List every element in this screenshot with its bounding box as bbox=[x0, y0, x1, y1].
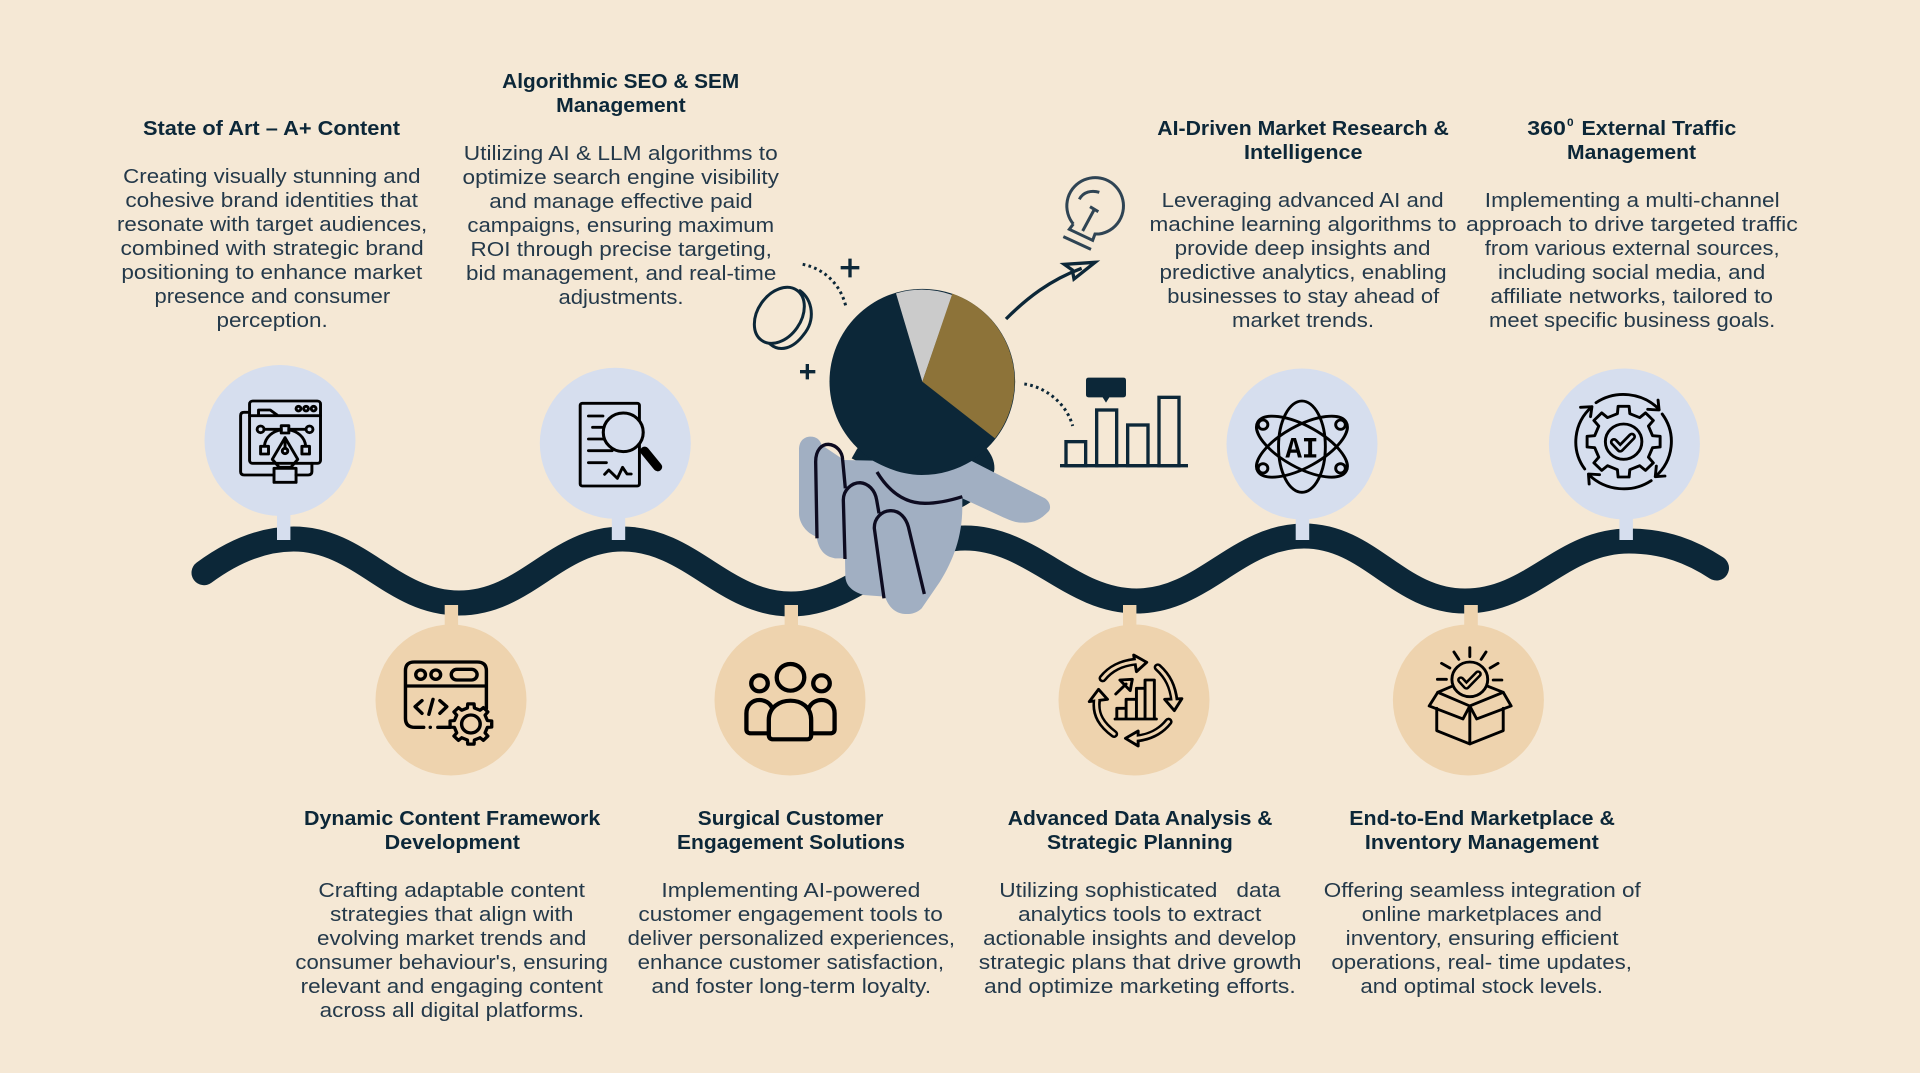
bar chart icon bbox=[1060, 378, 1188, 466]
heading: Advanced Data Analysis: Strategic Planning bbox=[1047, 832, 1233, 854]
panel: Surgical Customer Engagement bbox=[628, 808, 955, 998]
heading: Dynamic Content Framework: Dynamic Content Framework bbox=[304, 808, 601, 830]
description: Dynamic Content Framework bbox=[295, 880, 608, 1022]
heading: Surgical Customer Engagement: Surgical Customer bbox=[698, 808, 884, 830]
description: Advanced Data Analysis: and optimize marketing efforts. bbox=[984, 976, 1296, 998]
description: AI-Driven Market Research: businesses to stay ahead of bbox=[1167, 286, 1440, 308]
heading: AI-Driven Market Research: AI-Driven Market Research & bbox=[1157, 118, 1449, 140]
description: Advanced Data Analysis: actionable insights and develop bbox=[983, 928, 1296, 950]
heading: Algorithmic SEO bbox=[502, 71, 739, 117]
description: End-to-End Marketplace: and optimal stock levels. bbox=[1360, 976, 1603, 998]
description: 360 External Traffic: approach to drive targeted traffic bbox=[1466, 214, 1798, 236]
heading: 360 External Traffic: 0 bbox=[1567, 117, 1574, 129]
description: State of Art: cohesive brand identities that bbox=[125, 190, 418, 212]
description: 360 External Traffic: Implementing a multi-channel bbox=[1485, 190, 1780, 212]
description: AI-Driven Market Research: machine learning algorithms to bbox=[1150, 214, 1457, 236]
description: Advanced Data Analysis: strategic plans that drive growth bbox=[979, 952, 1302, 974]
description: State of Art bbox=[117, 166, 427, 332]
icon: AI atom bbox=[1247, 401, 1357, 492]
heading: Surgical Customer Engagement: Engagement Solutions bbox=[677, 832, 905, 854]
heading: 360 External Traffic: External Traffic bbox=[1582, 118, 1736, 140]
icon: code window and gear bbox=[405, 662, 492, 744]
hand bbox=[799, 437, 1050, 614]
heading: AI-Driven Market Research bbox=[1157, 118, 1449, 164]
node 2: blue circle with search icon bbox=[540, 368, 691, 540]
description: 360 External Traffic: from various external sources, bbox=[1485, 238, 1780, 260]
icon: pen tool in browser window bbox=[241, 401, 321, 482]
icon: AI atom: AI bbox=[1285, 434, 1318, 467]
description: State of Art: combined with strategic brand bbox=[120, 238, 424, 260]
description: AI-Driven Market Research: market trends. bbox=[1232, 310, 1374, 332]
heading: End-to-End Marketplace: Inventory Management bbox=[1365, 832, 1599, 854]
heading: Advanced Data Analysis bbox=[1008, 808, 1272, 854]
description: AI-Driven Market Research: provide deep insights and bbox=[1175, 238, 1430, 260]
icon: large plus bbox=[841, 259, 859, 277]
dotted arc right bbox=[1024, 384, 1073, 426]
description: State of Art: resonate with target audiences, bbox=[117, 214, 427, 236]
description: Algorithmic SEO: ROI through precise targeting, bbox=[470, 239, 772, 261]
description: Surgical Customer Engagement bbox=[628, 880, 955, 998]
node 7: orange circle with analytics icon bbox=[1058, 605, 1210, 776]
description: Advanced Data Analysis: Utilizing sophisticated data bbox=[999, 880, 1281, 902]
arrow to lightbulb bbox=[1006, 262, 1095, 319]
description: End-to-End Marketplace: inventory, ensuring efficient bbox=[1346, 928, 1619, 950]
description: Surgical Customer Engagement: enhance customer satisfaction, bbox=[638, 952, 944, 974]
description: End-to-End Marketplace bbox=[1324, 880, 1641, 998]
description: Algorithmic SEO: adjustments. bbox=[558, 287, 684, 309]
description: 360 External Traffic bbox=[1466, 190, 1798, 332]
panel: End-to-End Marketplace bbox=[1324, 808, 1641, 998]
panel: Dynamic Content Framework bbox=[295, 808, 608, 1022]
description: Dynamic Content Framework: across all digital platforms. bbox=[320, 1000, 584, 1022]
node 3: blue circle with AI icon bbox=[1226, 368, 1378, 540]
description: Algorithmic SEO: and manage effective paid bbox=[489, 191, 753, 213]
description: Dynamic Content Framework: strategies that align with bbox=[330, 904, 573, 926]
timeline wave bbox=[204, 536, 1716, 604]
description: Dynamic Content Framework: consumer behaviour's, ensuring bbox=[295, 952, 608, 974]
heading: End-to-End Marketplace bbox=[1349, 808, 1615, 854]
description: Advanced Data Analysis: analytics tools to extract bbox=[1018, 904, 1262, 926]
panel: 360 External Traffic bbox=[1466, 117, 1798, 332]
node 1: blue circle with design icon bbox=[204, 365, 356, 540]
description: State of Art: positioning to enhance market bbox=[121, 262, 423, 284]
description: AI-Driven Market Research: Leveraging advanced AI and bbox=[1162, 190, 1444, 212]
description: Algorithmic SEO: Utilizing AI & LLM algorithms to bbox=[464, 143, 778, 165]
description: 360 External Traffic: meet specific business goals. bbox=[1489, 310, 1775, 332]
description: Surgical Customer Engagement: deliver personalized experiences, bbox=[628, 928, 955, 950]
heading: Advanced Data Analysis: Advanced Data Analysis & bbox=[1008, 808, 1272, 830]
heading: 360 External Traffic bbox=[1527, 117, 1736, 164]
heading: Dynamic Content Framework bbox=[304, 808, 601, 854]
node 4: blue circle with gear icon bbox=[1549, 368, 1700, 540]
heading: Algorithmic SEO: Management bbox=[556, 95, 686, 117]
heading: AI-Driven Market Research: Intelligence bbox=[1244, 142, 1362, 164]
description: State of Art: presence and consumer bbox=[154, 286, 391, 308]
description: Algorithmic SEO: bid management, and real-time bbox=[466, 263, 776, 285]
description: Surgical Customer Engagement: customer engagement tools to bbox=[638, 904, 943, 926]
panel: Advanced Data Analysis bbox=[979, 808, 1302, 998]
description: End-to-End Marketplace: Offering seamless integration of bbox=[1324, 880, 1641, 902]
panel: State of Art bbox=[117, 118, 427, 332]
description: Algorithmic SEO: campaigns, ensuring maximum bbox=[467, 215, 774, 237]
description: 360 External Traffic: including social media, and bbox=[1498, 262, 1765, 284]
icon: coin bbox=[744, 278, 815, 353]
description: End-to-End Marketplace: online marketplaces and bbox=[1362, 904, 1602, 926]
heading: End-to-End Marketplace: End-to-End Marketplace & bbox=[1349, 808, 1615, 830]
node 5: orange circle with code icon bbox=[376, 605, 526, 776]
icon: lightbulb bbox=[1063, 178, 1123, 249]
description: Algorithmic SEO: optimize search engine visibility bbox=[462, 167, 779, 189]
heading: Dynamic Content Framework: Development bbox=[385, 832, 520, 854]
hand shadow shape bbox=[852, 448, 994, 507]
description: AI-Driven Market Research: predictive analytics, enabling bbox=[1160, 262, 1447, 284]
description: State of Art: Creating visually stunning and bbox=[123, 166, 420, 188]
panel: Algorithmic SEO bbox=[462, 71, 779, 309]
icon: open box with check bbox=[1429, 648, 1511, 744]
node 8: orange circle with box icon bbox=[1393, 605, 1544, 776]
icon: gear with check and cycle arrows bbox=[1576, 394, 1671, 489]
heading: Algorithmic SEO: Algorithmic SEO & SEM bbox=[502, 71, 739, 93]
description: Algorithmic SEO bbox=[462, 143, 779, 309]
icon: bar chart with cycle arrows bbox=[1089, 655, 1182, 746]
icon: document with magnifier bbox=[580, 403, 658, 486]
central illustration: hand holding pie chart bbox=[744, 178, 1188, 614]
dotted arc left bbox=[803, 264, 846, 306]
description: Surgical Customer Engagement: Implementing AI-powered bbox=[661, 880, 920, 902]
description: End-to-End Marketplace: operations, real- time updates, bbox=[1331, 952, 1632, 974]
description: 360 External Traffic: affiliate networks, tailored to bbox=[1490, 286, 1773, 308]
heading: 360 External Traffic: 360 bbox=[1527, 118, 1566, 140]
node 6: orange circle with people icon bbox=[714, 605, 866, 776]
description: Surgical Customer Engagement: and foster long-term loyalty. bbox=[651, 976, 931, 998]
icon: small plus bbox=[800, 364, 815, 379]
pie chart bbox=[829, 289, 1015, 474]
icon: group of people bbox=[746, 664, 835, 739]
description: Dynamic Content Framework: evolving market trends and bbox=[317, 928, 586, 950]
description: AI-Driven Market Research bbox=[1150, 190, 1457, 332]
heading: State of Art: State of Art – A+ Content bbox=[143, 118, 400, 140]
heading: 360 External Traffic: Management bbox=[1567, 142, 1696, 164]
description: Advanced Data Analysis bbox=[979, 880, 1302, 998]
panel: AI-Driven Market Research bbox=[1150, 118, 1457, 332]
description: Dynamic Content Framework: relevant and engaging content bbox=[301, 976, 603, 998]
heading: Surgical Customer Engagement bbox=[677, 808, 905, 854]
description: Dynamic Content Framework: Crafting adaptable content bbox=[318, 880, 586, 902]
description: State of Art: perception. bbox=[216, 310, 328, 332]
